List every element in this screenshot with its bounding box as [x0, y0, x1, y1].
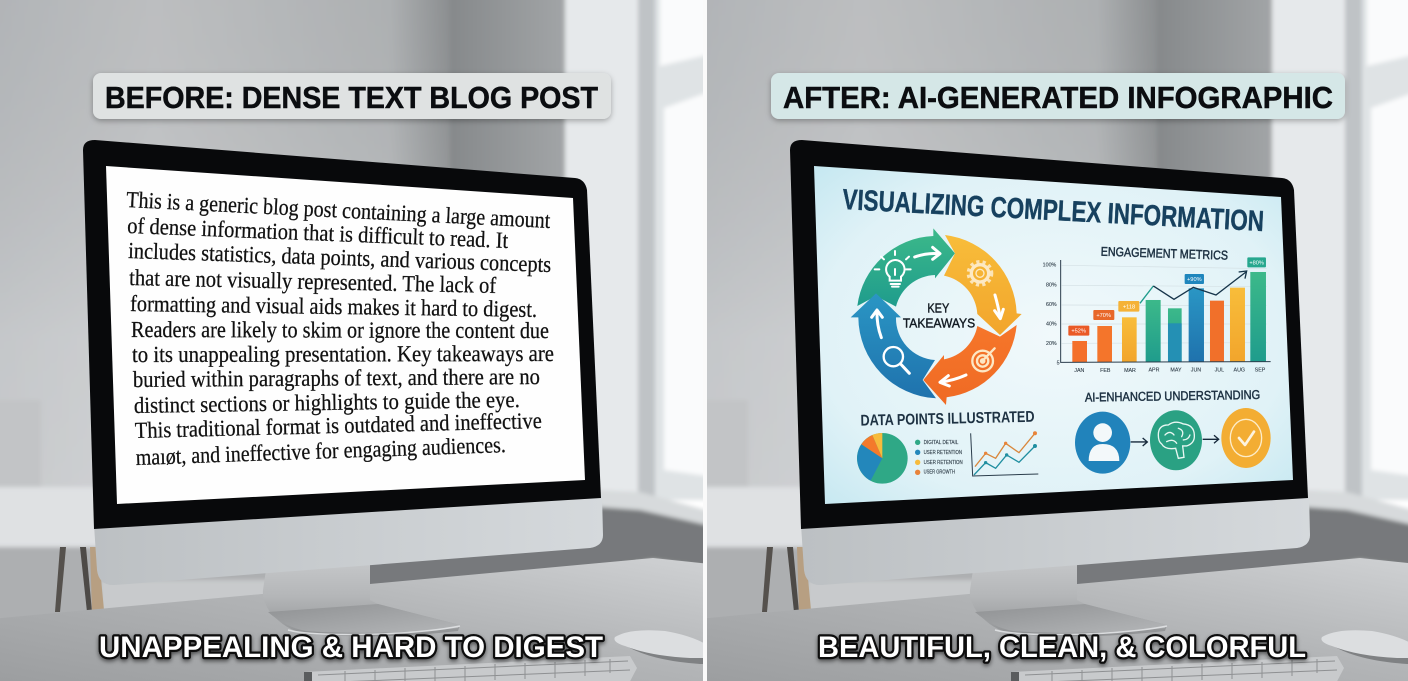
dense paragraph text: of dense information that is difficult to read. It	[127, 213, 509, 253]
value callouts: +80%	[1249, 260, 1264, 266]
dense paragraph text: This traditional format is outdated and ineffective	[135, 408, 542, 443]
pie legend: USER GROWTH	[924, 469, 955, 475]
dense paragraph text: This is a generic blog post containing a large amount	[126, 187, 551, 233]
bar chart: APR	[1149, 368, 1160, 374]
heading: data points illustrated: DATA POINTS ILLUSTRATED	[860, 409, 1035, 430]
center label: KEY	[927, 301, 950, 316]
desktop monitor	[83, 140, 603, 636]
panel: after	[697, 0, 1408, 681]
dense paragraph text: distinct sections or highlights to guide the eye.	[134, 387, 520, 418]
icon: light bulb	[875, 251, 911, 287]
orange arrow segment	[923, 325, 1017, 405]
bar chart: AUG	[1234, 368, 1245, 374]
caption: before: UNAPPEALING & HARD TO DIGEST	[99, 631, 603, 664]
divider	[703, 0, 708, 681]
bar chart: FEB	[1100, 368, 1111, 374]
caption: after: BEAUTIFUL, CLEAN, & COLORFUL	[818, 631, 1306, 664]
bar chart: JAN	[1074, 368, 1085, 374]
panel: before	[0, 0, 720, 681]
background scene: office wall, window and desk	[0, 0, 720, 681]
screen: colorful infographic	[814, 166, 1293, 504]
bar chart: JUN	[1191, 368, 1201, 374]
dense paragraph text: buried within paragraphs of text, and there are no	[133, 364, 540, 392]
value callouts: +90%	[1187, 277, 1202, 283]
heading: AI-enhanced understanding: AI-ENHANCED UNDERSTANDING	[1085, 388, 1260, 405]
cycle diagram: key takeaways	[851, 228, 1022, 405]
data points section	[857, 409, 1038, 484]
bar chart: 80%	[1046, 282, 1057, 288]
bar chart: SEP	[1255, 367, 1266, 373]
value callouts: +70%	[1096, 313, 1111, 319]
bar chart: 40%	[1046, 321, 1057, 327]
pie chart	[857, 433, 908, 484]
dense paragraph text: that are not visually represented. The lack of	[129, 265, 497, 298]
arrow	[1203, 435, 1219, 443]
icon: check	[1221, 408, 1271, 468]
trend line	[1140, 271, 1247, 303]
screen with dense text	[106, 166, 585, 504]
engagement metrics section	[1043, 245, 1271, 374]
arrow	[1131, 438, 1147, 446]
icon: magnifier	[884, 347, 909, 373]
pie legend: USER RETENTION	[924, 460, 963, 466]
icon: brain	[1150, 410, 1202, 470]
value callouts: +52%	[1071, 329, 1086, 335]
inner white arrows	[872, 247, 1003, 386]
line chart	[971, 431, 1038, 476]
pie legend: DIGITAL DETAIL	[924, 440, 958, 446]
green arrow segment	[857, 228, 955, 307]
bar chart: JUL	[1215, 368, 1224, 374]
heading pill: after: AFTER: AI-GENERATED INFOGRAPHIC	[783, 80, 1333, 115]
heading: engagement metrics: ENGAGEMENT METRICS	[1101, 245, 1228, 263]
desktop monitor	[790, 140, 1310, 636]
bar chart: MAY	[1170, 368, 1182, 374]
pie legend: USER RETENTION	[924, 450, 962, 456]
dense paragraph text: maıøt, and ineffective for engaging audiences.	[135, 432, 506, 470]
icon: gear	[969, 262, 991, 284]
bar chart: 5	[1057, 360, 1060, 366]
bar chart: 100%	[1043, 263, 1057, 269]
dense paragraph text: includes statistics, data points, and various concepts	[128, 238, 552, 277]
value callouts: +118	[1123, 304, 1135, 310]
bar chart	[1043, 257, 1271, 374]
icon: target	[972, 348, 995, 371]
screen title: VISUALIZING COMPLEX INFORMATION	[842, 184, 1265, 238]
background scene: office wall, window and desk	[697, 0, 1408, 681]
dense paragraph text: formatting and visual aids makes it hard to digest.	[130, 291, 537, 322]
bar chart: MAR	[1124, 368, 1136, 374]
dense paragraph text: to its unappealing presentation. Key takeaways are	[132, 341, 554, 367]
yellow arrow segment	[944, 235, 1022, 335]
center label	[903, 301, 975, 331]
dense paragraph text: Readers are likely to skim or ignore the content due	[131, 317, 549, 343]
blue arrow segment	[851, 293, 936, 398]
center label: TAKEAWAYS	[903, 316, 975, 331]
AI-enhanced understanding section	[1075, 388, 1271, 474]
bar chart: 60%	[1046, 302, 1057, 308]
bar chart: 20%	[1046, 341, 1057, 347]
pie legend	[915, 440, 963, 475]
value callouts	[1068, 257, 1266, 336]
icon: person	[1075, 412, 1130, 474]
dense paragraph text	[126, 187, 554, 470]
heading pill: before: BEFORE: DENSE TEXT BLOG POST	[105, 80, 598, 115]
